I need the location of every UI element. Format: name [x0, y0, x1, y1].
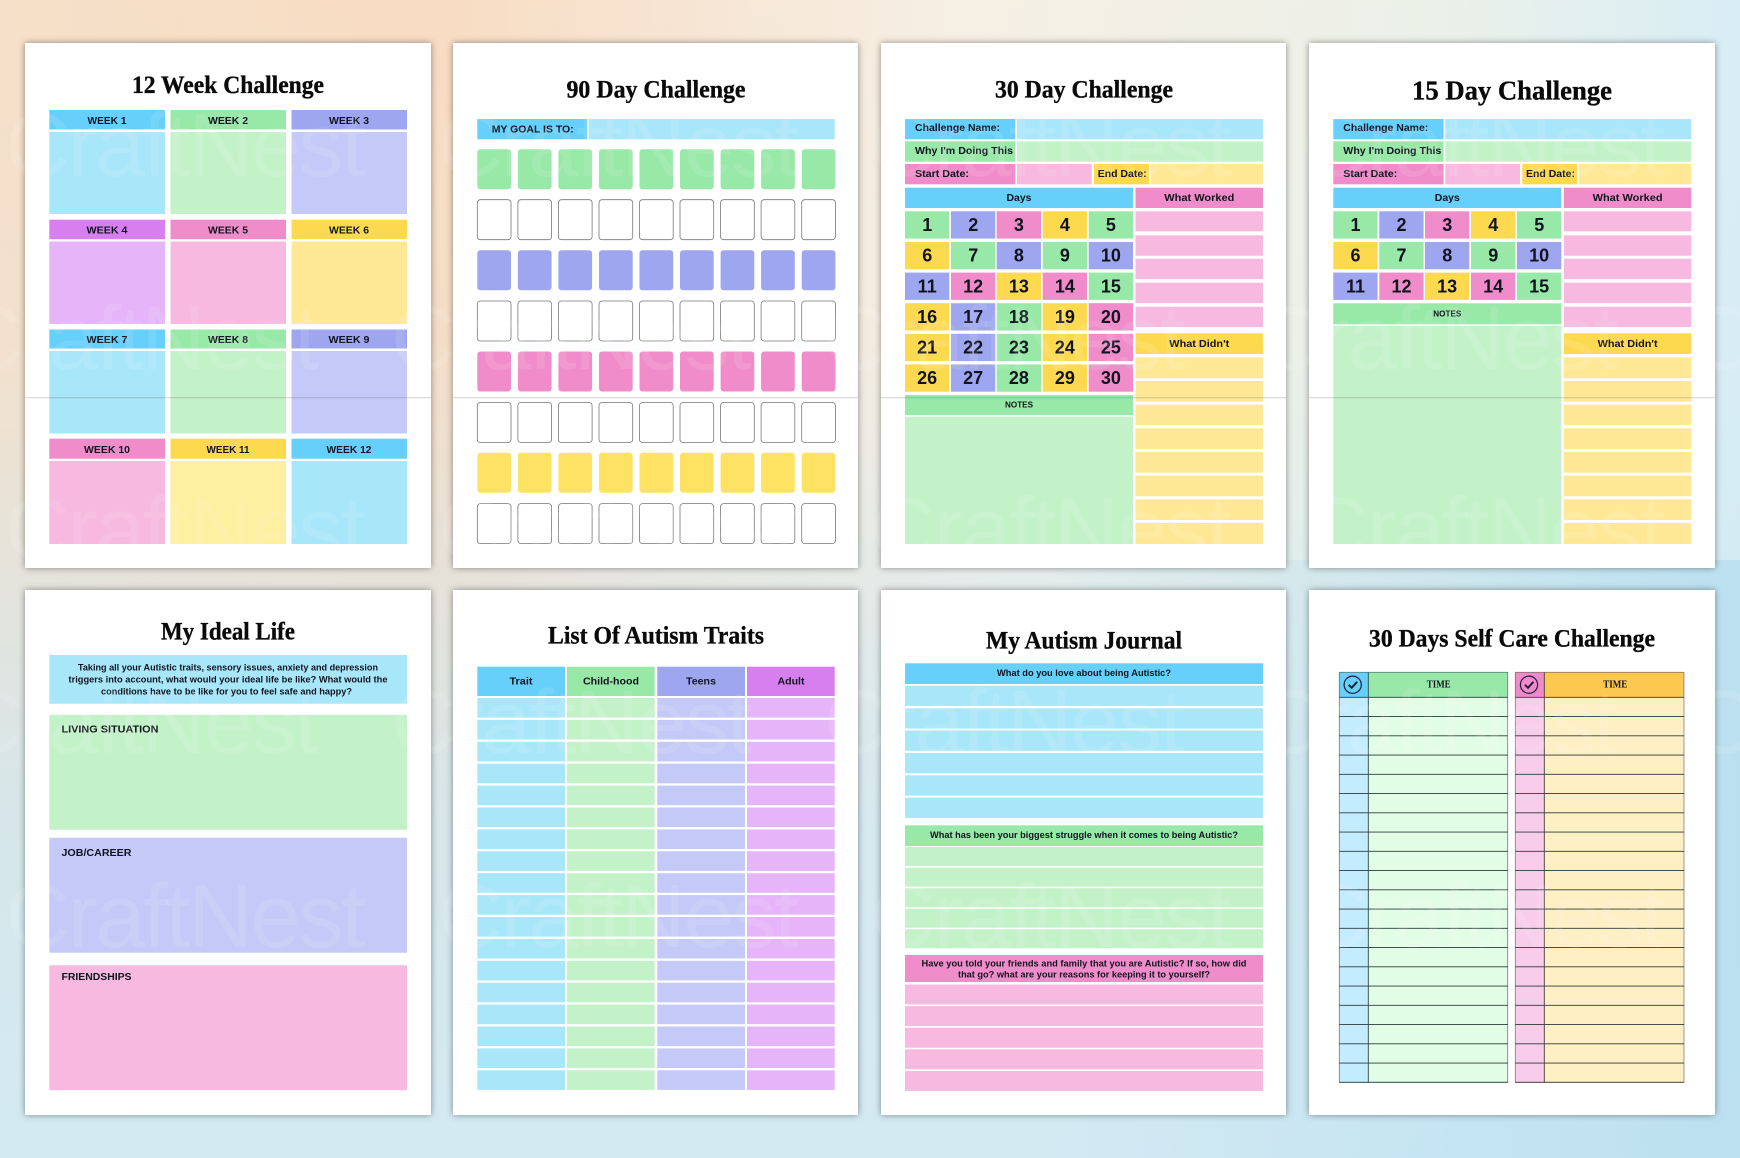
goal bar	[477, 119, 835, 139]
day numbers grid 1-30: 3	[1014, 215, 1024, 235]
right checklist table: TIME	[1603, 680, 1627, 691]
question 3 block	[905, 955, 1263, 1091]
day numbers grid 1-15: 10	[1529, 246, 1549, 266]
intro prompt box: Taking all your Autistic traits, sensory issues, anxiety and depression	[78, 662, 378, 672]
day numbers grid 1-15	[1333, 211, 1561, 300]
week 6 block	[292, 220, 407, 324]
day numbers grid 1-30: 5	[1106, 215, 1116, 235]
day numbers grid 1-15: 3	[1442, 215, 1452, 235]
week 9 block	[292, 330, 407, 434]
panel: 15 Day Challenge	[1309, 43, 1715, 568]
watermark: repeated CraftNest: CraftNest	[1304, 867, 1665, 967]
question 1 block: What do you love about being Autistic?	[997, 668, 1171, 678]
challenge details form: End Date:	[1098, 168, 1147, 180]
day numbers grid 1-15: 2	[1396, 215, 1407, 235]
challenge details form	[1333, 119, 1691, 184]
day numbers grid 1-30: 21	[917, 337, 937, 357]
what didn't section: What Didn't	[1169, 338, 1230, 350]
icon: check circle	[1344, 676, 1361, 693]
title: 15 Day Challenge: 15 Day Challenge	[1412, 75, 1612, 105]
week 2 block: WEEK 2	[208, 115, 248, 127]
what worked section: What Worked	[1164, 192, 1234, 204]
yellow squares row	[477, 453, 835, 493]
what didn't section	[1564, 333, 1691, 544]
panel: 30 Days Self Care Challenge	[1309, 590, 1715, 1115]
challenge details form: Why I'm Doing This	[1343, 145, 1441, 157]
watermark: repeated CraftNest: CraftNest	[1257, 289, 1618, 389]
day numbers grid 1-30: 6	[922, 246, 932, 266]
job/career box: JOB/CAREER	[62, 847, 132, 859]
day numbers grid 1-30: 20	[1101, 307, 1121, 327]
day numbers grid 1-15: 6	[1350, 246, 1361, 266]
watermark: repeated CraftNest: CraftNest	[391, 673, 752, 773]
week 10 block	[49, 439, 165, 544]
day numbers grid 1-30: 1	[922, 215, 932, 235]
day numbers grid 1-30: 16	[917, 307, 937, 327]
week 3 block	[292, 110, 407, 214]
day numbers grid 1-30: 11	[918, 276, 937, 296]
week 4 block: WEEK 4	[86, 225, 128, 237]
days header	[1333, 188, 1561, 208]
watermark: repeated CraftNest: CraftNest	[1304, 480, 1665, 580]
week 6 block: WEEK 6	[329, 225, 369, 237]
icon: check circle	[1520, 676, 1538, 693]
left checklist table	[1339, 672, 1508, 1082]
days header	[905, 188, 1133, 208]
day numbers grid 1-30: 27	[963, 368, 983, 388]
panel: 12 Week Challenge	[25, 43, 431, 568]
day numbers grid 1-15: 15	[1529, 276, 1549, 296]
pink squares row	[477, 352, 835, 392]
what didn't section	[1136, 333, 1263, 544]
week 5 block	[170, 220, 286, 324]
week 11 block: WEEK 11	[206, 444, 250, 456]
notes section	[905, 395, 1133, 544]
challenge details form: Start Date:	[915, 168, 969, 180]
day numbers grid 1-15: 8	[1442, 246, 1452, 266]
question 3 block: that go? what are your reasons for keeping it to yourself?	[958, 970, 1210, 980]
right checklist table	[1515, 672, 1684, 1082]
watermark: repeated CraftNest: CraftNest	[5, 96, 366, 196]
notes section: NOTES	[1005, 400, 1033, 410]
childhood column	[567, 667, 655, 1090]
adult column: Adult	[778, 675, 805, 687]
day numbers grid 1-15: 12	[1391, 276, 1412, 296]
day numbers grid 1-15: 13	[1437, 276, 1457, 296]
week 7 block	[49, 330, 165, 434]
childhood column: Child-hood	[583, 675, 639, 687]
friendships box: FRIENDSHIPS	[62, 971, 132, 983]
panel: My Ideal Life	[25, 590, 431, 1115]
what didn't section: What Didn't	[1598, 338, 1658, 350]
day numbers grid 1-30: 14	[1055, 276, 1075, 296]
day numbers grid 1-30: 7	[968, 246, 978, 266]
watermark: repeated CraftNest: CraftNest	[438, 867, 799, 967]
day numbers grid 1-30: 26	[917, 368, 937, 388]
day numbers grid 1-30: 17	[963, 307, 983, 327]
day numbers grid 1-30: 9	[1060, 246, 1070, 266]
teens column	[657, 667, 745, 1090]
challenge details form: Challenge Name:	[1343, 122, 1428, 134]
watermark: repeated CraftNest: CraftNest	[5, 867, 366, 967]
question 1 block	[905, 663, 1263, 818]
question 2 block	[905, 825, 1263, 948]
days header: Days	[1006, 192, 1032, 204]
day numbers grid 1-30: 23	[1009, 337, 1029, 357]
challenge details form	[905, 119, 1263, 184]
week 7 block: WEEK 7	[86, 334, 128, 346]
watermark: repeated CraftNest: CraftNest	[5, 480, 366, 580]
day numbers grid 1-15: 9	[1488, 246, 1498, 266]
challenge details form: Start Date:	[1343, 168, 1397, 180]
left checklist table: TIME	[1427, 680, 1451, 691]
question 2 block: What has been your biggest struggle when it comes to being Autistic?	[930, 830, 1238, 840]
living situation box: LIVING SITUATION	[62, 723, 158, 735]
watermark: repeated CraftNest: CraftNest	[438, 96, 799, 196]
week 3 block: WEEK 3	[329, 115, 369, 127]
day numbers grid 1-15: 4	[1488, 215, 1498, 235]
day numbers grid 1-30: 12	[963, 276, 983, 296]
friendships box	[49, 965, 407, 1090]
week 9 block: WEEK 9	[328, 334, 370, 346]
day numbers grid 1-30: 15	[1101, 276, 1121, 296]
watermark: repeated CraftNest: CraftNest	[1257, 673, 1618, 773]
watermark: repeated CraftNest: CraftNest	[391, 289, 752, 389]
challenge details form: Challenge Name:	[915, 122, 1000, 134]
day numbers grid 1-30: 10	[1101, 246, 1121, 266]
watermark: repeated CraftNest: CraftNest	[1304, 96, 1665, 196]
green squares row	[477, 149, 835, 189]
job/career box	[49, 838, 407, 953]
day numbers grid 1-15: 1	[1350, 215, 1361, 235]
goal bar: MY GOAL IS TO:	[492, 124, 574, 136]
day numbers grid 1-30: 13	[1009, 276, 1029, 296]
day numbers grid 1-30	[905, 211, 1133, 392]
title: List Of Autism Traits: List Of Autism Traits	[548, 622, 764, 649]
trait column: Trait	[510, 675, 533, 687]
notes section	[1333, 303, 1561, 544]
week 1 block: WEEK 1	[88, 115, 127, 127]
living situation box	[49, 715, 407, 830]
day numbers grid 1-30: 18	[1009, 307, 1029, 327]
week 8 block: WEEK 8	[208, 334, 248, 346]
day numbers grid 1-30: 29	[1055, 368, 1075, 388]
day numbers grid 1-30: 30	[1101, 368, 1121, 388]
panel: My Autism Journal	[881, 590, 1286, 1115]
week 11 block	[170, 439, 286, 544]
week 4 block	[49, 220, 165, 324]
trait column	[477, 667, 565, 1090]
watermark: repeated CraftNest	[0, 96, 1740, 967]
day numbers grid 1-30: 19	[1055, 307, 1075, 327]
week 1 block	[49, 110, 165, 214]
intro prompt box: triggers into account, what would your ideal life be like? What would the	[68, 674, 388, 684]
watermark: repeated CraftNest: CraftNest	[824, 289, 1185, 389]
teens column: Teens	[686, 675, 716, 687]
day numbers grid 1-15: 14	[1483, 276, 1503, 296]
title: My Ideal Life: My Ideal Life	[161, 618, 295, 645]
watermark: repeated CraftNest: CraftNest	[871, 867, 1232, 967]
empty squares row 4	[477, 504, 835, 544]
week 12 block: WEEK 12	[326, 444, 372, 456]
title: My Autism Journal: My Autism Journal	[986, 627, 1182, 654]
watermark: repeated CraftNest: CraftNest	[871, 96, 1232, 196]
title: 90 Day Challenge: 90 Day Challenge	[566, 77, 746, 104]
watermark: repeated CraftNest: CraftNest	[438, 480, 799, 580]
days header: Days	[1435, 192, 1460, 204]
intro prompt box	[49, 655, 407, 704]
day numbers grid 1-15: 5	[1534, 215, 1544, 235]
day numbers grid 1-30: 22	[963, 337, 983, 357]
week 12 block	[292, 439, 407, 544]
panel: 30 Day Challenge	[881, 43, 1286, 568]
question 3 block: Have you told your friends and family that you are Autistic? If so, how did	[922, 958, 1246, 968]
what worked section	[1564, 188, 1691, 327]
day numbers grid 1-30: 2	[968, 215, 978, 235]
panel: List Of Autism Traits	[453, 590, 858, 1115]
intro prompt box: conditions have to be like for you to feel safe and happy?	[101, 686, 352, 696]
notes section: NOTES	[1433, 309, 1462, 319]
day numbers grid 1-30: 25	[1101, 337, 1121, 357]
day numbers grid 1-30: 24	[1055, 337, 1075, 357]
what worked section: What Worked	[1593, 192, 1663, 204]
week 10 block: WEEK 10	[84, 444, 130, 456]
empty squares row 3	[477, 402, 835, 442]
empty squares row 2	[477, 301, 835, 341]
day numbers grid 1-15: 7	[1396, 246, 1407, 266]
watermark: repeated CraftNest: CraftNest	[871, 480, 1232, 580]
title: 30 Days Self Care Challenge: 30 Days Self Care Challenge	[1369, 626, 1655, 653]
day numbers grid 1-30: 28	[1009, 368, 1029, 388]
what worked section	[1136, 188, 1263, 327]
week 2 block	[170, 110, 286, 214]
title: 12 Week Challenge: 12 Week Challenge	[132, 72, 324, 99]
day numbers grid 1-30: 8	[1014, 246, 1024, 266]
week 8 block	[170, 330, 286, 434]
empty squares row 1	[477, 200, 835, 240]
challenge details form: End Date:	[1526, 168, 1575, 180]
week 5 block: WEEK 5	[208, 225, 248, 237]
adult column	[747, 667, 835, 1090]
panel: 90 Day Challenge	[453, 43, 858, 568]
challenge details form: Why I'm Doing This	[915, 145, 1013, 157]
periwinkle squares row	[477, 250, 835, 290]
title: 30 Day Challenge: 30 Day Challenge	[995, 77, 1173, 104]
watermark: repeated CraftNest: CraftNest	[824, 673, 1185, 773]
day numbers grid 1-30: 4	[1060, 215, 1070, 235]
day numbers grid 1-15: 11	[1346, 276, 1365, 296]
